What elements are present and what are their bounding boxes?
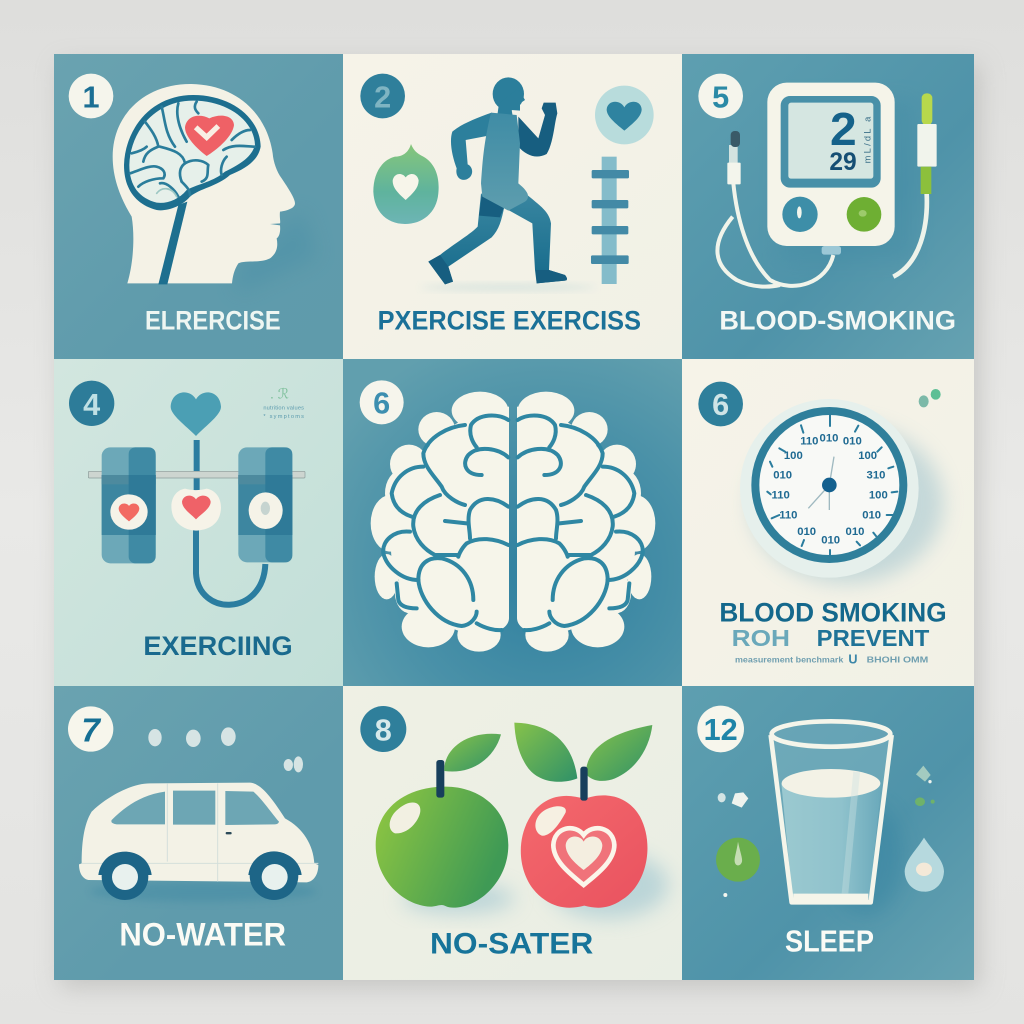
number badge 12 (697, 706, 744, 752)
left sparkles (718, 792, 748, 897)
panel 5: large brain (343, 359, 682, 686)
dial: 100 (869, 490, 888, 502)
heart circle (595, 86, 654, 144)
label: NO-SATER (430, 928, 593, 961)
left cylinder (102, 447, 156, 563)
number badge 2 (360, 74, 405, 118)
meter body (767, 83, 895, 255)
balloon icons (148, 727, 303, 772)
number badge 4 (69, 381, 114, 426)
dial: 310 (867, 469, 885, 481)
number badge 4: 4 (83, 388, 100, 422)
number badge 7: 7 (81, 713, 101, 750)
dial: 110 (779, 510, 797, 522)
meter body: mL/dL a (863, 116, 873, 163)
subtitle (733, 630, 930, 646)
fine print: BHOHI OMM (867, 655, 928, 665)
right sparkles (915, 766, 935, 806)
panel 1: head with brain (54, 54, 343, 359)
dial: 010 (797, 526, 816, 538)
panel 8: apples (343, 686, 682, 980)
fine print: measurement benchmark (735, 655, 844, 665)
number badge 5: 5 (712, 80, 729, 114)
tube (196, 440, 265, 605)
left cable (717, 131, 833, 287)
heart in apple (553, 828, 614, 885)
panel 6: gauge (682, 359, 974, 686)
screen digits: 2 (830, 103, 857, 155)
number badge 2: 2 (374, 80, 391, 114)
tiny top-right caption (263, 385, 304, 420)
dial: 010 (820, 433, 838, 445)
dial: 010 (846, 526, 864, 538)
panel 9: water glass (682, 686, 974, 980)
dial: 010 (773, 469, 792, 481)
dial: 010 (843, 435, 862, 447)
fine print (736, 654, 928, 664)
number badge: 6 (373, 386, 390, 420)
panel 2: runner (343, 54, 682, 359)
heart top (171, 392, 221, 436)
label: SLEEP (785, 925, 874, 959)
brain (371, 392, 655, 652)
small dots (919, 389, 941, 407)
number badge (698, 382, 743, 426)
van (79, 783, 318, 900)
dial: 010 (862, 510, 881, 522)
number badge 7 (68, 706, 113, 752)
tiny top-right caption: nutrition values (263, 405, 304, 411)
dial: 110 (772, 490, 790, 502)
meter body: 29 (829, 148, 857, 176)
label: PXERCISE EXERCISS (378, 305, 641, 335)
panel 7: car (54, 686, 343, 980)
number badge 8: 8 (375, 713, 392, 747)
right probe (893, 93, 937, 277)
running figure (428, 77, 567, 284)
label: EXERCIING (143, 631, 293, 661)
label: NO-WATER (119, 917, 286, 953)
number badge 1 (69, 74, 113, 118)
water drop (905, 838, 944, 892)
title line: BLOOD SMOKING (719, 598, 947, 628)
tiny top-right caption: . ℛ (270, 385, 289, 401)
label: ELRERCISE (145, 305, 281, 335)
panel 3: blood meter (682, 54, 974, 359)
green heart apple (373, 144, 439, 224)
subtitle: PREVENT (817, 625, 929, 651)
fine print: U (848, 652, 857, 666)
green apple (376, 734, 508, 908)
dial (740, 399, 919, 578)
number badge 12: 12 (704, 713, 738, 747)
green circle droplet (716, 838, 760, 882)
tiny top-right caption: * symptoms (263, 414, 304, 420)
ladder icon (591, 157, 629, 284)
number badge 1: 1 (82, 80, 100, 114)
dial: 100 (858, 450, 877, 462)
bar (88, 471, 305, 478)
number badge: 6 (712, 388, 729, 422)
dial: 110 (800, 435, 818, 447)
glass (771, 721, 892, 903)
label: BLOOD-SMOKING (719, 305, 956, 335)
subtitle: ROH (732, 625, 790, 651)
right cylinder (238, 447, 292, 562)
number badge (360, 380, 404, 424)
panel 4: exercising cuff (54, 359, 343, 686)
brain inside head (124, 95, 261, 284)
dial: 010 (821, 535, 840, 547)
number badge 8 (360, 706, 406, 752)
dial: 100 (784, 450, 803, 462)
red apple (514, 723, 652, 908)
number badge 5 (698, 74, 743, 118)
centre heart pad (171, 489, 221, 531)
head silhouette (113, 84, 295, 283)
